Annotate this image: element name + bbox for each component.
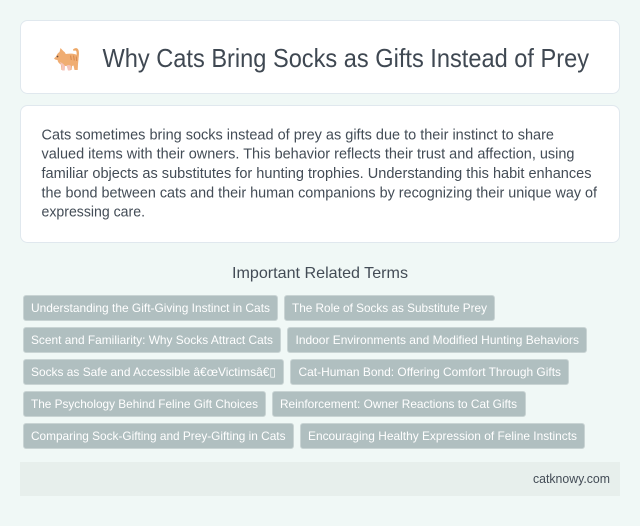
tag group: related terms [24, 296, 586, 448]
footer source text: catknowy.com [533, 471, 610, 486]
tag: substitute prey: The Role of Socks as Substitute Prey [292, 301, 487, 315]
tag: cat-human bond [290, 360, 568, 384]
tag: comparing gifting: Comparing Sock-Gifting and Prey-Gifting in Cats [31, 429, 286, 443]
text block: summary paragraph: expressing care. [42, 205, 145, 221]
tag: safe victims: Socks as Safe and Accessible â€œVictimsâ€▯ [31, 365, 276, 379]
tag: comparing gifting [24, 424, 294, 448]
tag: cat-human bond: Cat-Human Bond: Offering Comfort Through Gifts [298, 365, 561, 379]
heading: related terms: Important Related Terms [232, 265, 408, 282]
tag: reinforcement: Reinforcement: Owner Reactions to Cat Gifts [280, 397, 517, 411]
tag: scent and familiarity: Scent and Familiarity: Why Socks Attract Cats [31, 333, 273, 347]
tag: substitute prey [284, 296, 494, 320]
tag: psychology: The Psychology Behind Feline Gift Choices [31, 397, 258, 411]
text block: summary paragraph: familiar objects as substitutes for hunting trophies. Understanding this habit enhances [42, 166, 592, 182]
tag: safe victims [24, 360, 284, 384]
text block: summary paragraph: the bond between cats and their human companions by recognizing their unique way of [42, 185, 598, 201]
panel: summary text [20, 106, 620, 242]
tag: gift-giving instinct: Understanding the Gift-Giving Instinct in Cats [31, 301, 270, 315]
tag: reinforcement [272, 392, 526, 416]
tag: psychology [24, 392, 266, 416]
tag: indoor environments: Indoor Environments and Modified Hunting Behaviors [296, 333, 579, 347]
title: Why Cats Bring Socks as Gifts Instead of Prey [102, 45, 589, 73]
text block: summary paragraph [42, 127, 598, 221]
tag: indoor environments [288, 328, 586, 352]
tag: gift-giving instinct [24, 296, 278, 320]
tag: encouraging expression: Encouraging Healthy Expression of Feline Instincts [308, 429, 577, 443]
icon: orange cat [54, 48, 79, 70]
footer [20, 462, 620, 496]
tag: scent and familiarity [24, 328, 280, 352]
tag: encouraging expression [300, 424, 584, 448]
text block: summary paragraph: valued items with their owners. This behavior reflects their trust and affection, using [42, 147, 574, 163]
panel: title header [20, 20, 620, 94]
text block: summary paragraph: Cats sometimes bring socks instead of prey as gifts due to their instinct to share [42, 127, 554, 143]
